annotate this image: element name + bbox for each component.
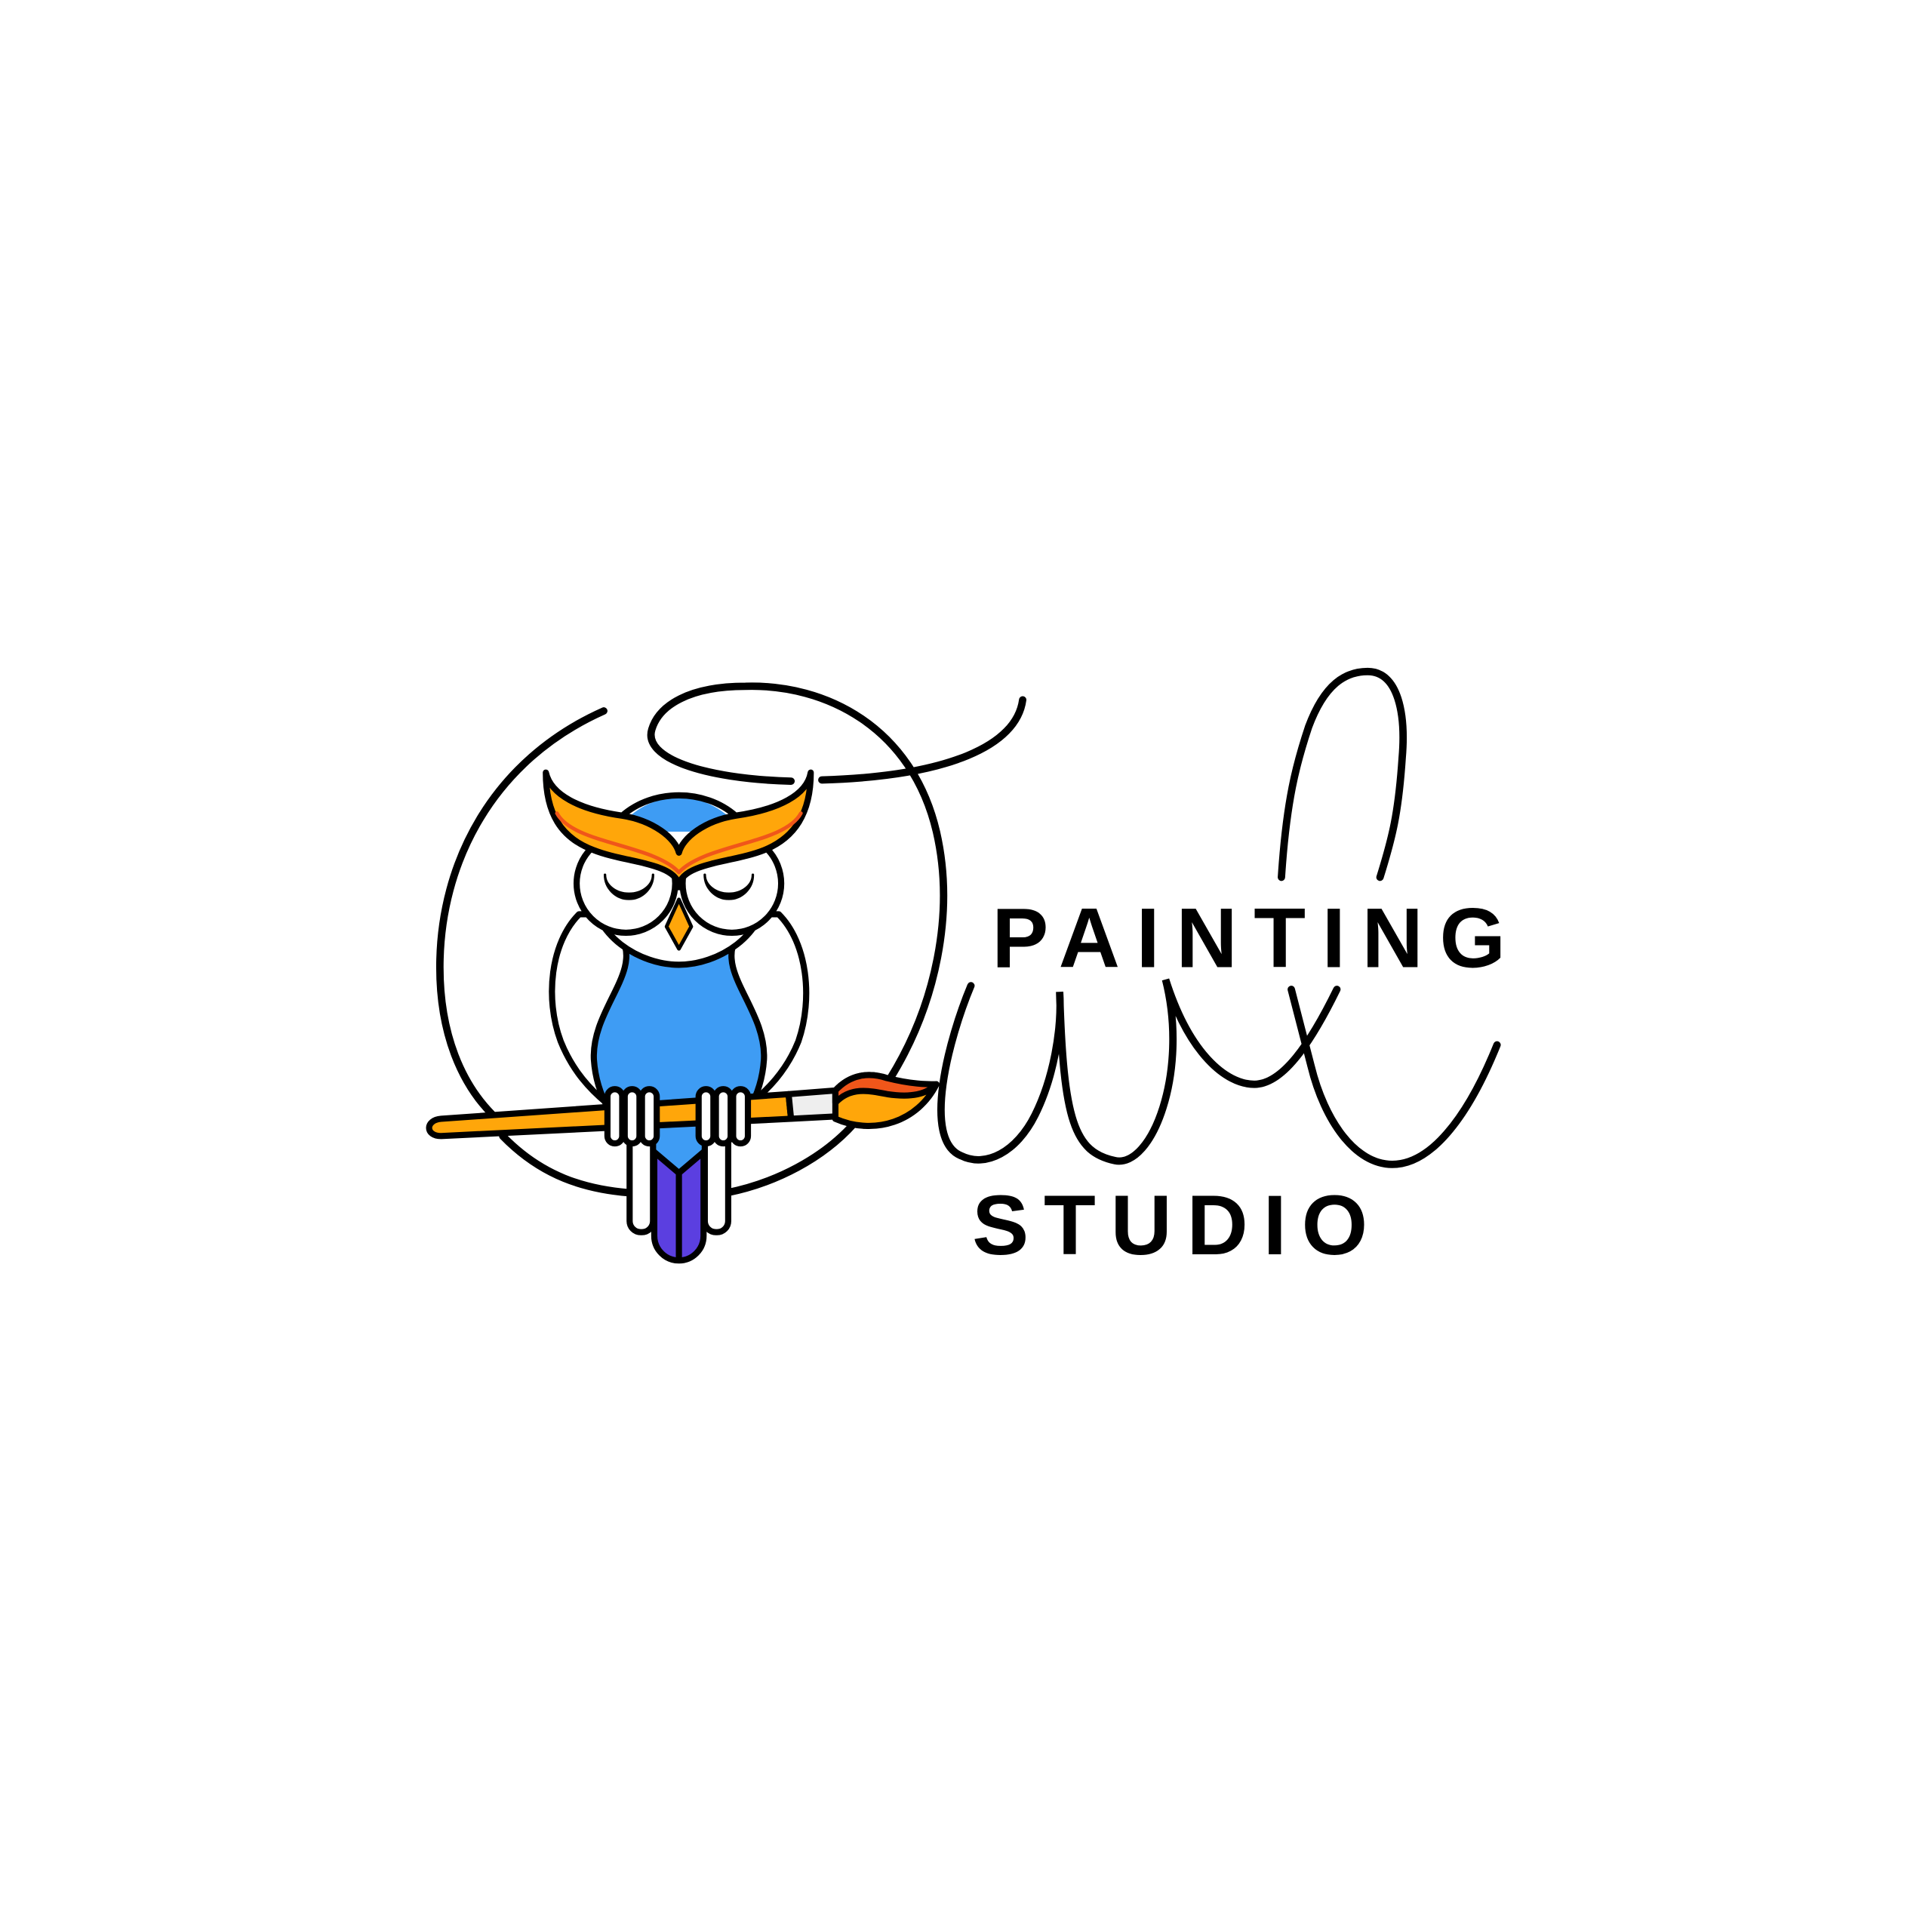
brush ferrule [789, 1091, 838, 1118]
paint brush handle [429, 1094, 791, 1136]
owl body outline [552, 914, 806, 1103]
beak [666, 900, 691, 949]
owl belly [594, 939, 764, 1173]
brush head [835, 1075, 937, 1126]
script lettering: wl [941, 672, 1497, 1164]
tail [654, 1152, 703, 1260]
script lettering: big O swirl [440, 686, 1023, 1192]
owl face [592, 888, 767, 964]
closed eyes [605, 875, 653, 899]
text: PAINTING: PAINTING [992, 891, 1506, 986]
owl head dome [616, 795, 742, 832]
ear tufts [546, 773, 811, 884]
legs [629, 1128, 653, 1232]
owl [429, 773, 937, 1260]
eyes [577, 834, 675, 933]
text: STUDIO: STUDIO [972, 1177, 1367, 1272]
claws [608, 1089, 622, 1143]
